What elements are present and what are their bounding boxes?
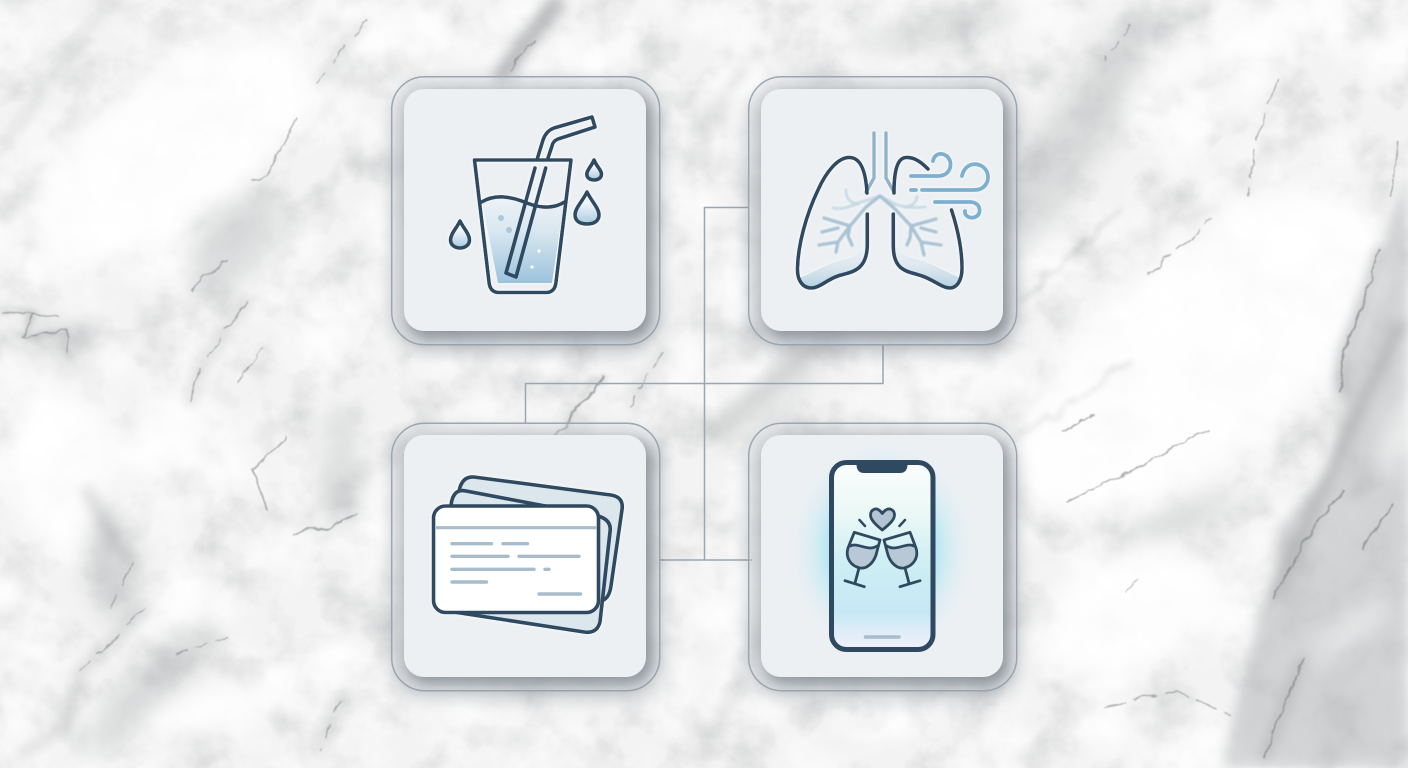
icon: lungs: [797, 133, 988, 288]
icon: glass with straw and drops: [450, 117, 602, 292]
icon: phone: [832, 462, 933, 650]
connector lines: [526, 208, 883, 560]
icon: wine glasses: [845, 532, 920, 587]
panel: water glass: [392, 77, 660, 351]
card text lines: [452, 544, 580, 594]
phone glow: [786, 438, 978, 662]
icon: wind: [911, 154, 988, 218]
icon: heart: [870, 509, 894, 530]
panel: lungs and wind: [749, 77, 1017, 351]
panel: stacked cards: [392, 423, 660, 697]
icon: stacked cards: [434, 477, 622, 632]
panel: phone with toasting glasses: [749, 423, 1017, 697]
